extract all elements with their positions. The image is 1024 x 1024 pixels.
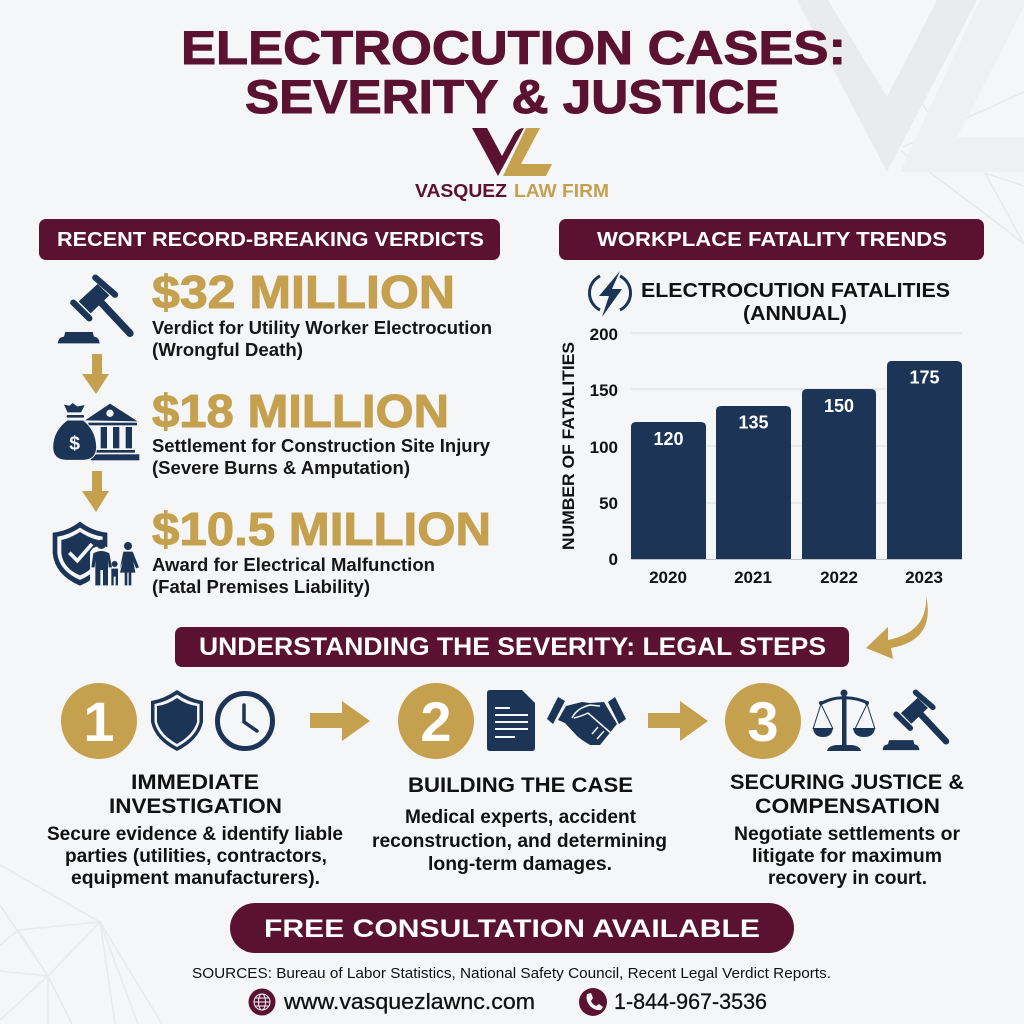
bar chart: electrocution fatalities: 2022 [820,568,858,587]
logo: Vasquez Law Firm: LAW FIRM [514,180,609,201]
icon: money bag and bank: $ [69,433,80,454]
step 2: building the case: Medical experts, accident [405,807,637,828]
bar chart: electrocution fatalities: 175 [909,368,940,388]
step 2: building the case: 2 [420,690,452,753]
chart title [641,280,950,325]
verdict: $18 million [152,385,490,478]
call to action: free consultation: FREE CONSULTATION AVAILABLE [264,915,760,943]
verdict: $10.5 million: $10.5 MILLION [152,503,491,555]
step 1: immediate investigation: equipment manufacturers). [71,868,320,889]
chart title: ELECTROCUTION FATALITIES [641,280,950,302]
title: SEVERITY & JUSTICE [245,70,779,123]
step 2: building the case: long-term damages. [428,854,612,875]
title: ELECTROCUTION CASES: [181,21,846,74]
bar chart: electrocution fatalities: 200 [590,325,618,344]
icon: clock [218,694,272,748]
icon: gavel [58,278,130,343]
call to action: free consultation [230,903,794,953]
heading: workplace fatality trends: WORKPLACE FATALITY TRENDS [597,229,947,251]
bar chart: electrocution fatalities: 2020 [649,568,687,587]
verdict: $32 million [152,266,492,360]
step 1: immediate investigation: INVESTIGATION [109,795,282,818]
bar chart: electrocution fatalities: NUMBER OF FATALITIES [559,342,578,550]
heading: legal steps: UNDERSTANDING THE SEVERITY: LEGAL STEPS [199,633,826,661]
verdict: $10.5 million: Award for Electrical Malfunction [152,555,435,575]
verdict: $18 million: (Severe Burns & Amputation) [152,458,410,478]
bar chart: electrocution fatalities: 2023 [905,568,943,587]
step 2: building the case: BUILDING THE CASE [408,774,633,797]
verdict: $18 million: $18 MILLION [152,385,449,437]
step 3: securing justice: COMPENSATION [755,795,940,818]
icon: document [487,690,535,751]
bar chart: electrocution fatalities: 2021 [734,568,772,587]
step 3: securing justice: litigate for maximum [752,846,942,867]
verdict: $32 million: Verdict for Utility Worker Electrocution [152,318,492,338]
step 1: immediate investigation: parties (utilities, contractors, [65,846,327,867]
step 2: building the case: reconstruction, and determining [372,831,667,852]
arrow: curved to legal steps [866,596,928,659]
icon: scales of justice [813,690,875,751]
contact: website: www.vasquezlawnc.com [283,989,535,1014]
step 3: securing justice [725,683,964,889]
step 1: immediate investigation: 1 [83,690,115,753]
icon: shield [151,690,203,751]
heading: legal steps [175,627,849,667]
step 3: securing justice: Negotiate settlements or [734,824,961,845]
bar chart: electrocution fatalities: 150 [590,381,618,400]
bar chart: electrocution fatalities: 120 [653,429,684,449]
chart title: (ANNUAL) [743,303,847,325]
step 1: immediate investigation [47,683,343,889]
contact: phone: 1-844-967-3536 [614,989,767,1014]
icon: lightning bolt [589,271,631,317]
title [181,21,846,123]
icon: money bag and bank [53,403,139,460]
step 3: securing justice: 3 [747,690,779,753]
arrow: step 2 to 3 [648,701,708,741]
step 1: immediate investigation: Secure evidence & identify liable [47,824,343,845]
bar chart: electrocution fatalities: 50 [599,494,618,513]
verdict: $10.5 million: (Fatal Premises Liability) [152,577,370,597]
icon: gavel [883,692,946,750]
bar chart: electrocution fatalities [559,325,962,587]
step 3: securing justice: recovery in court. [768,868,927,889]
arrow: down 1 [82,354,109,394]
heading: recent verdicts: RECENT RECORD-BREAKING VERDICTS [57,229,484,251]
bar chart: electrocution fatalities: 135 [738,412,769,432]
verdict: $32 million: (Wrongful Death) [152,340,303,360]
watermark: VL monogram [797,0,1024,172]
step 2: building the case [372,683,667,875]
logo: Vasquez Law Firm: VASQUEZ [415,180,507,201]
logo: Vasquez Law Firm [415,128,609,201]
arrow: step 1 to 2 [310,701,370,741]
sources: SOURCES: Bureau of Labor Statistics, National Safety Council, Recent Legal Verdict Reports. [192,966,831,982]
heading: workplace fatality trends [559,219,984,260]
verdict: $18 million: Settlement for Construction Site Injury [152,436,490,456]
icon: handshake [547,697,626,745]
bar chart: electrocution fatalities: 0 [609,550,618,569]
bar chart: electrocution fatalities: 150 [824,396,854,416]
arrow: down 2 [82,471,109,512]
verdict: $32 million: $32 MILLION [152,266,455,318]
verdict: $10.5 million [152,503,491,597]
icon: shield and family [53,522,139,586]
step 3: securing justice: SECURING JUSTICE & [730,771,964,794]
bar chart: electrocution fatalities: 100 [590,438,618,457]
heading: recent verdicts [39,219,500,260]
step 1: immediate investigation: IMMEDIATE [131,771,259,794]
